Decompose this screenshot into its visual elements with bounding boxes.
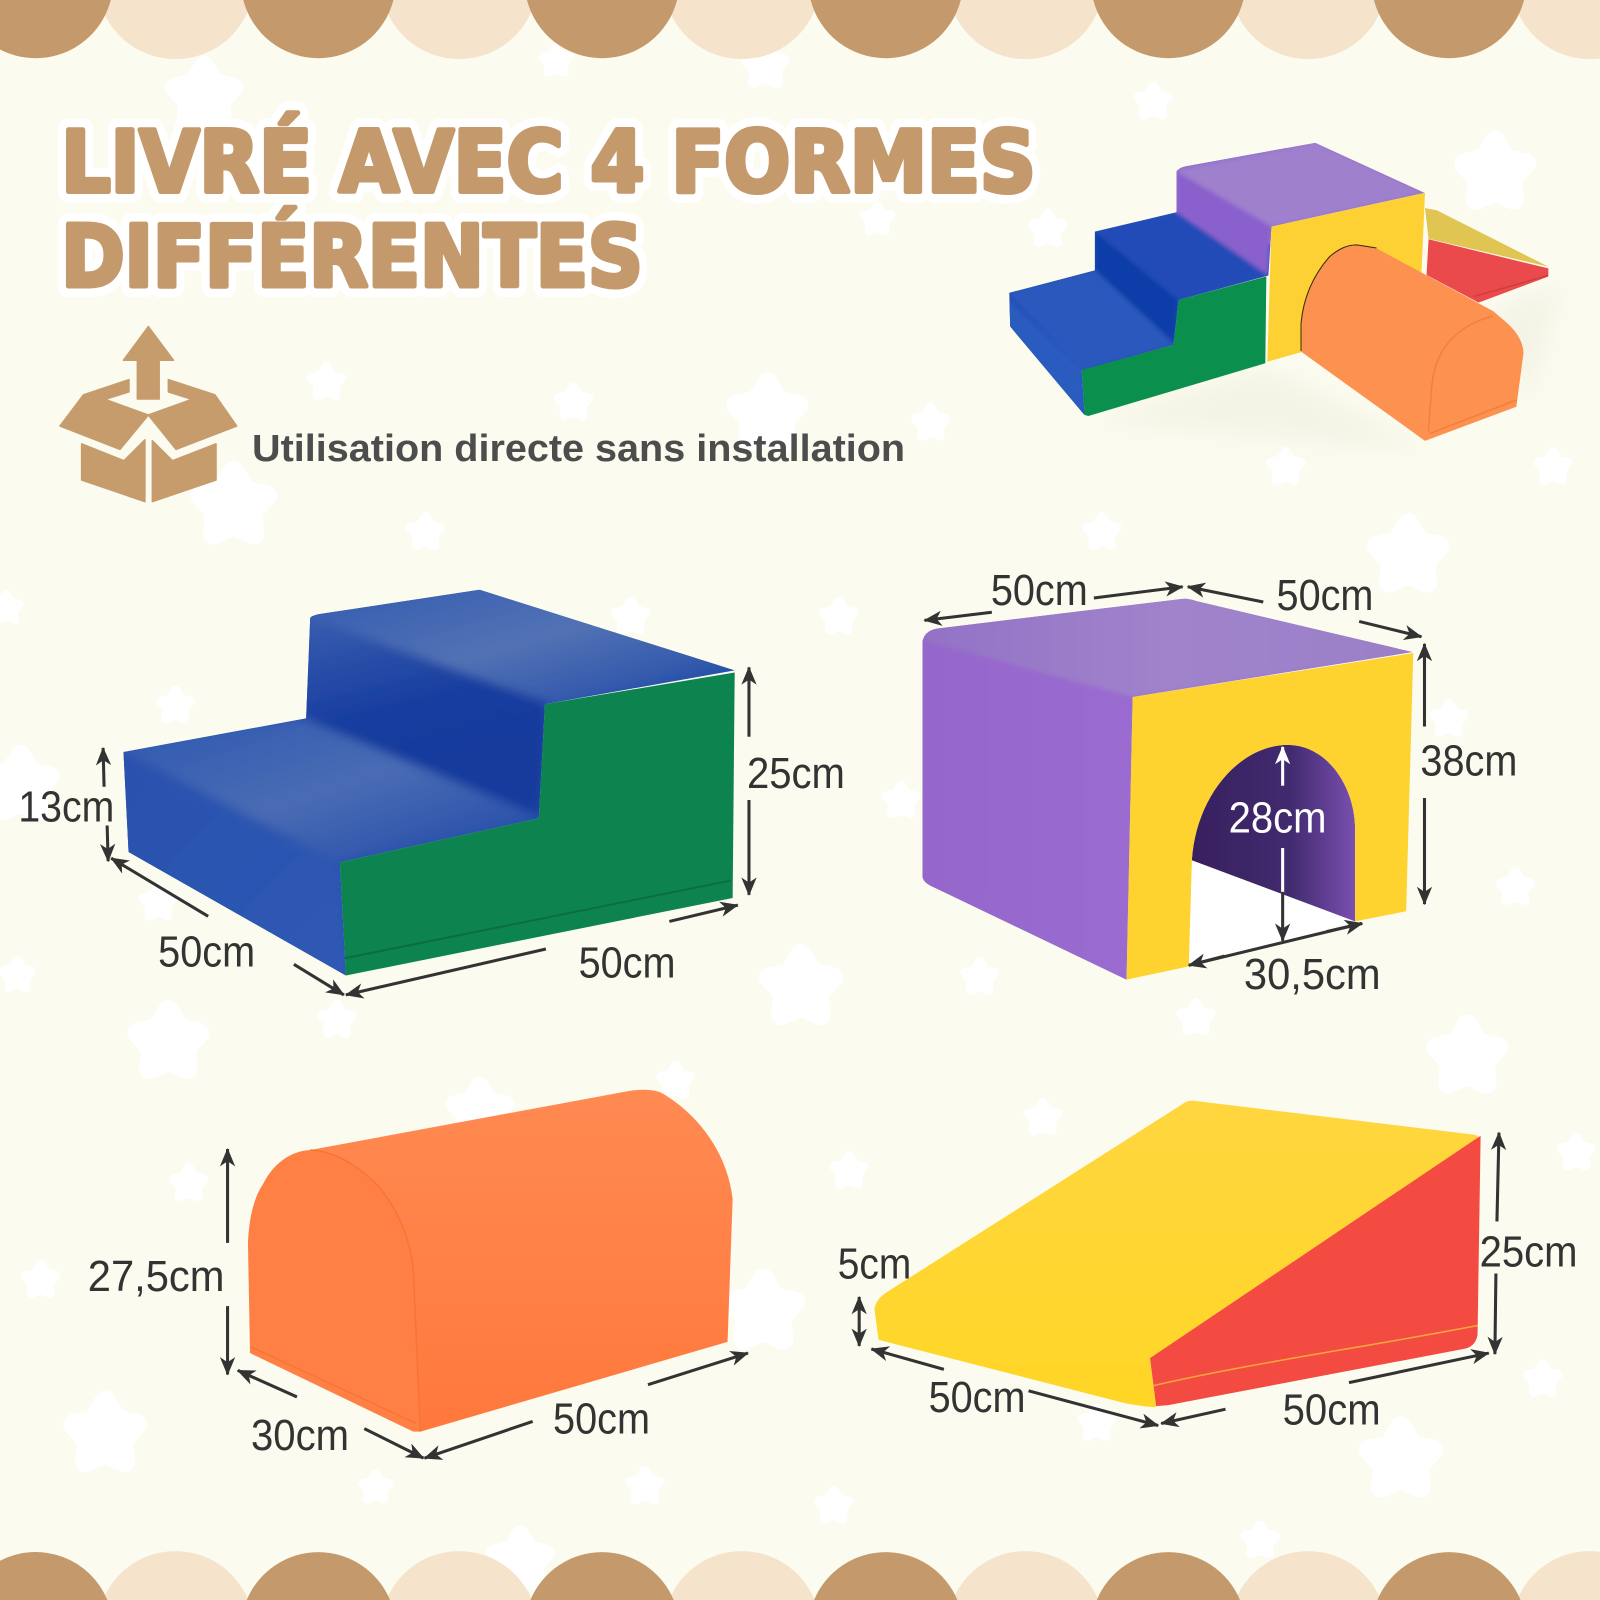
dimension: 50cm right [346, 905, 738, 995]
dimension: 50cm left [111, 858, 344, 995]
cap edge [251, 1150, 420, 1432]
dimension: 28cm: 28cm [1229, 794, 1327, 843]
cube soft faces [922, 598, 1412, 980]
product: tunnel cube [922, 598, 1414, 980]
product: orange half cylinder [248, 1090, 733, 1432]
title: LIVRÉ AVEC 4 FORMES [61, 111, 1036, 211]
dimension: 30cm: 30cm [251, 1411, 349, 1460]
yellow face [1267, 193, 1425, 362]
ramp behind [1425, 208, 1548, 303]
bottom scalloped border [0, 1551, 1600, 1600]
dimension: 50cm right: 50cm [579, 939, 676, 988]
product: assembled set [1000, 133, 1561, 449]
green face [1082, 277, 1266, 416]
dimension: 50cm top left [924, 566, 1183, 620]
floor inside tunnel [1189, 860, 1355, 966]
dimension: 50cm left: 50cm [158, 927, 255, 976]
product: step block [112, 577, 745, 990]
seam [1153, 1326, 1478, 1386]
yellow slope [874, 1101, 1478, 1407]
dimension: 30cm [238, 1370, 423, 1460]
dimension: 50cm left: 50cm [929, 1373, 1026, 1422]
dimension: 13cm: 13cm [18, 782, 114, 831]
yellow front [1127, 653, 1413, 980]
dimension: 50cm right: 50cm [1283, 1385, 1381, 1434]
icon: open box with up arrow [60, 327, 237, 502]
green face [340, 672, 735, 976]
title: DIFFÉRENTES [61, 206, 643, 306]
red side [1150, 1136, 1481, 1406]
title [61, 111, 1036, 306]
dimension: 50cm left [871, 1349, 1158, 1426]
dimension: 30,5cm [1189, 923, 1381, 999]
end cap [248, 1150, 420, 1432]
orange half cylinder [1301, 245, 1523, 441]
dimension: 50cm: 50cm [553, 1395, 650, 1444]
dimension: 5cm: 5cm [838, 1240, 911, 1289]
dimension: 50cm right [1161, 1353, 1489, 1434]
dimension: 30,5cm: 30,5cm [1244, 950, 1381, 999]
dimension: 25cm: 25cm [1480, 1227, 1578, 1276]
blue and purple soft faces [1000, 133, 1429, 423]
dimension: 50cm top right [1188, 571, 1421, 637]
dimension: 50cm top right: 50cm [1277, 571, 1373, 620]
top scalloped border [0, 0, 1600, 59]
dimension: 5cm [838, 1240, 911, 1346]
subtitle: direct use: Utilisation directe sans installation [252, 427, 905, 469]
green seam [345, 881, 731, 958]
dimension: 25cm: 25cm [747, 749, 845, 798]
tunnel interior [1192, 745, 1355, 921]
blue faces with soft creases [112, 577, 745, 990]
dimension: 38cm: 38cm [1420, 737, 1517, 786]
body [306, 1090, 733, 1432]
dimension: 50cm top left: 50cm [991, 566, 1088, 615]
dimension: 27,5cm: 27,5cm [88, 1252, 224, 1301]
title: DIFFÉRENTES [61, 206, 643, 306]
ground shadow [1092, 286, 1561, 449]
dimension: 50cm [424, 1353, 748, 1458]
title: LIVRÉ AVEC 4 FORMES [61, 111, 1036, 211]
dimension: 13cm [18, 748, 114, 861]
product: wedge [874, 1101, 1481, 1407]
